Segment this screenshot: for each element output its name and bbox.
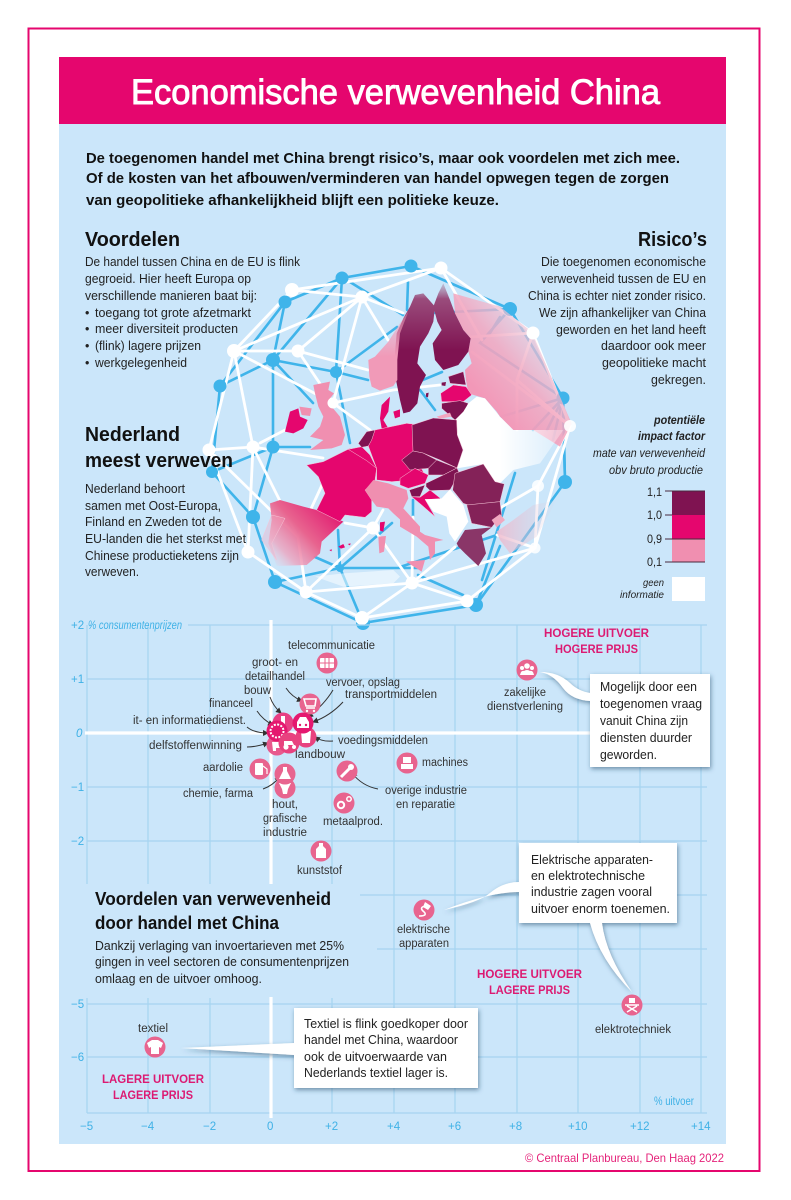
chart labels: bouw (244, 685, 272, 697)
icon: telecommunicatie (316, 652, 338, 674)
sector dots with icons (144, 652, 642, 1058)
country: Croatia (412, 490, 442, 517)
chart labels: elektrotechniek (595, 1024, 671, 1036)
callout: textiel: handel met China, waardoor (304, 1033, 458, 1047)
background panel (59, 124, 726, 1144)
icon: machines (396, 752, 418, 774)
icon: elektrotechniek (622, 994, 642, 1016)
scatter chart grid and axes: −6 (71, 1052, 84, 1064)
heading: Risico's: Risico’s (638, 229, 707, 251)
scatter chart grid and axes: +14 (691, 1121, 711, 1133)
quadrant label: hogere uitvoer lagere prijs (477, 967, 582, 997)
country: Belgium (348, 447, 377, 468)
text: Nederland: samen met Oost-Europa, (85, 499, 221, 513)
country: Bulgaria (467, 502, 502, 527)
text: Risico's: We zijn afhankelijker van China (539, 306, 706, 320)
callout: textiel: ook de uitvoerwaarde van (304, 1050, 447, 1064)
chart labels: kunststof (297, 865, 343, 877)
text: Nederland: verweven. (85, 565, 139, 579)
text: Risico's: geworden en het land heeft (556, 323, 707, 337)
icon: aardolie (250, 758, 270, 780)
map: south-west (262, 423, 427, 587)
country: Northern Ireland (299, 407, 312, 416)
legend (593, 413, 706, 601)
text: Voordelen: werkgelegenheid (94, 356, 187, 370)
scatter chart grid and axes: 0 (267, 1121, 273, 1133)
credit: © Centraal Planbureau, Den Haag 2022 (525, 1151, 724, 1165)
heading: Nederland meest verweven: Nederland (85, 424, 180, 446)
chart labels: telecommunicatie (288, 640, 375, 652)
network nodes (202, 262, 576, 625)
title (59, 57, 726, 124)
intro text (86, 150, 680, 209)
island: Sardinia (378, 536, 386, 553)
text: Risico's: China is echter niet zonder risico. (528, 289, 706, 303)
country: Hungary (426, 468, 459, 491)
chart labels: hout, (272, 799, 298, 811)
country: Romania (453, 464, 504, 505)
text: Voordelen (85, 255, 301, 370)
heading: Nederland meest verweven: meest verweven (85, 450, 233, 472)
country: Estonia (448, 372, 466, 385)
chart labels: apparaten (399, 938, 449, 950)
title: Economische verwevenheid China (131, 73, 661, 112)
region: North Africa (315, 570, 400, 587)
network nodes behind map (206, 260, 572, 630)
country: European Turkey (492, 514, 505, 527)
chart labels: landbouw (295, 749, 346, 761)
icon: overige industrie (336, 760, 358, 782)
legend: geen (643, 578, 664, 589)
text: Risico's: Die toegenomen economische (541, 255, 706, 269)
text: Risico's (528, 255, 707, 387)
heading: voordelen van verwevenheid: door handel met China (95, 912, 280, 933)
legend: 1,0 (647, 508, 662, 522)
country: Western Balkans (425, 489, 468, 542)
chart labels: zakelijke (504, 687, 546, 699)
quadrant label: hogere uitvoer hogere prijs: HOGERE PRIJS (555, 642, 638, 656)
country: Ireland (285, 408, 308, 433)
chart labels: en reparatie (396, 799, 455, 811)
legend: 0,1 (647, 555, 662, 569)
chart labels: delfstoffenwinning (149, 740, 242, 752)
country: Greece (457, 527, 492, 566)
chart pointer arrows (247, 688, 378, 789)
chart labels: vervoer, opslag (326, 677, 400, 689)
country: France (307, 448, 377, 522)
country: Czechia (402, 451, 437, 470)
icon: zakelijke dienstverlening (516, 660, 538, 680)
chart labels: chemie, farma (183, 788, 254, 800)
country: Slovakia (428, 460, 457, 475)
chart labels: aardolie (203, 762, 243, 774)
icon: hout (274, 778, 296, 798)
scatter chart grid and axes: +8 (509, 1121, 522, 1133)
map: south-east (400, 397, 563, 572)
scatter chart grid and axes (71, 620, 711, 1133)
legend: potentiële (653, 413, 705, 427)
chart labels: grafische (263, 813, 307, 825)
text: voordelen van verwevenheid: omlaag en de uitvoer omhoog. (95, 972, 262, 986)
scatter chart grid and axes: +10 (568, 1121, 588, 1133)
callout: elektrische apparaten: Elektrische apparaten- (531, 853, 653, 867)
scatter chart grid and axes: +12 (630, 1121, 650, 1133)
text: voordelen van verwevenheid: gingen in veel sectoren de consumentenprijzen (95, 955, 349, 969)
country: Norway (368, 312, 408, 391)
icon: chemie (274, 764, 296, 784)
scatter chart grid and axes: +1 (71, 674, 84, 686)
legend: 0,9 (647, 532, 662, 546)
callout: diensten: geworden. (600, 748, 657, 762)
country: Italy north (365, 480, 420, 537)
callout: elektrische apparaten: uitvoer enorm toenemen. (531, 902, 670, 916)
scatter chart grid and axes: +4 (387, 1121, 401, 1133)
scatter chart grid and axes: −1 (71, 782, 84, 794)
text: Voordelen: • (85, 339, 89, 353)
text: Voordelen: • (85, 356, 89, 370)
icon: financieel (266, 720, 288, 742)
chart labels: metaalprod. (323, 816, 383, 828)
icon: elektrische apparaten (414, 900, 434, 920)
legend: impact factor (638, 429, 706, 443)
text: Voordelen: (flink) lagere prijzen (95, 339, 201, 353)
intro text: van geopolitieke afhankelijkheid blijft een politieke keuze. (86, 192, 499, 209)
text: Risico's: gekregen. (651, 373, 706, 387)
country: Austria (400, 468, 428, 488)
map: north-west (285, 312, 408, 450)
callout: diensten: Mogelijk door een (600, 680, 697, 694)
chart labels (133, 640, 671, 1036)
scatter chart grid and axes: % consumentenprijzen (88, 620, 182, 632)
Baltic islands (426, 382, 446, 397)
text: Risico's: daardoor ook meer (601, 339, 706, 353)
country: Denmark (380, 397, 400, 428)
chart labels: overige industrie (385, 785, 467, 797)
icon: kunststof (310, 840, 332, 862)
callout: textiel: Nederlands textiel lager is. (304, 1066, 448, 1080)
country: Latvia (441, 385, 472, 402)
country: UK (310, 382, 345, 450)
icon: landbouw (278, 732, 300, 754)
chart labels: industrie (263, 827, 307, 839)
chart labels: it- en informatiedienst. (133, 715, 246, 727)
callout: elektrische apparaten: en elektrotechnische (531, 869, 645, 883)
chart labels: machines (422, 757, 468, 769)
chart labels: dienstverlening (487, 701, 563, 713)
legend: 1,1 (647, 485, 662, 499)
text: Voordelen: meer diversiteit producten (95, 322, 238, 336)
scatter chart grid and axes: −4 (141, 1121, 155, 1133)
callout: diensten: toegenomen vraag (600, 697, 702, 711)
quadrant label: hogere uitvoer lagere prijs: HOGERE UITVOER (477, 967, 582, 981)
scatter chart grid and axes: +2 (71, 620, 84, 632)
country: Spain (268, 500, 343, 566)
chart labels: elektrische (397, 924, 450, 936)
Kaliningrad (437, 413, 452, 419)
text: Nederland: Nederland behoort (85, 482, 186, 496)
legend: informatie (620, 590, 664, 601)
country: Russia (453, 293, 572, 447)
icon: transport (292, 712, 314, 734)
callout: diensten: vanuit China zijn (600, 714, 688, 728)
icon: textiel (144, 1036, 166, 1058)
heading: Nederland meest verweven (85, 424, 233, 472)
text: Risico's: verwevenheid tussen de EU en (541, 272, 706, 286)
scatter chart grid and axes: −2 (203, 1121, 216, 1133)
icon: delfstoffen (266, 734, 288, 756)
quadrant label: lagere uitvoer lagere prijs: LAGERE UITVOER (102, 1072, 204, 1086)
country: Finland (433, 283, 471, 370)
map of Europe (262, 283, 572, 587)
quadrant label: hogere uitvoer hogere prijs (544, 626, 649, 656)
heading: Voordelen: Voordelen (85, 229, 180, 251)
scatter chart grid and axes: −2 (71, 836, 84, 848)
chart labels: detailhandel (245, 671, 305, 683)
text: Voordelen: • (85, 322, 89, 336)
text: Voordelen: verschillende manieren baat bij: (85, 289, 257, 303)
chart labels: voedingsmiddelen (338, 735, 428, 747)
intro text: Of de kosten van het afbouwen/verminderen van handel opwegen tegen de zorgen (86, 170, 669, 187)
callout: elektrische apparaten: industrie zagen vooral (531, 885, 652, 899)
country: Lithuania (442, 401, 468, 420)
country: Slovenia (409, 485, 425, 497)
text: Nederland: EU-landen die het sterkst met (85, 532, 247, 546)
country: Italy south (400, 512, 443, 560)
island: Corsica (380, 522, 385, 532)
icon: voeding (296, 726, 316, 748)
chart labels: groot- en (252, 657, 298, 669)
country: Portugal (262, 515, 285, 560)
callout: diensten: diensten duurder (600, 731, 692, 745)
text: Voordelen: gegroeid. Hier heeft Europa op (85, 272, 251, 286)
scatter chart grid and axes: +6 (448, 1121, 461, 1133)
text: voordelen van verwevenheid: Dankzij verlaging van invoertarieven met 25% (95, 939, 344, 953)
callout: diensten (540, 672, 710, 767)
country: Sweden (395, 293, 435, 413)
country: Turkey (497, 500, 557, 553)
icon: detailhandel (300, 694, 320, 714)
text: Voordelen: • (85, 306, 89, 320)
chart labels: transportmiddelen (345, 689, 437, 701)
icon: metaalproducten (334, 792, 354, 814)
legend: mate van verwevenheid (593, 446, 705, 460)
heading: voordelen van verwevenheid (95, 888, 331, 933)
chart labels: textiel (138, 1023, 168, 1035)
legend: obv bruto productie (609, 463, 703, 477)
scatter chart grid and axes: 0 (76, 728, 83, 740)
network globe (206, 260, 572, 630)
callout: textiel: Textiel is flink goedkoper door (304, 1017, 468, 1031)
country: Poland (412, 418, 463, 468)
intro text: De toegenomen handel met China brengt risico’s, maar ook voordelen met zich mee. (86, 150, 680, 167)
country: Germany (368, 423, 427, 482)
callout: textiel (181, 1008, 478, 1088)
callout: elektrische apparaten (444, 843, 677, 992)
island: Sicily (406, 560, 425, 572)
country: Ukraine and Belarus (455, 397, 563, 483)
scatter chart grid and axes: −5 (80, 1121, 93, 1133)
scatter chart grid and axes: −5 (71, 999, 84, 1011)
quadrant label: hogere uitvoer lagere prijs: LAGERE PRIJS (489, 983, 570, 997)
text: voordelen van verwevenheid (95, 939, 349, 986)
scatter chart grid and axes: % uitvoer (654, 1096, 694, 1108)
islands: Balearic (329, 543, 351, 551)
text: Risico's: geopolitieke macht (602, 356, 707, 370)
text: Nederland (85, 482, 247, 579)
chart labels: financeel (209, 698, 253, 710)
icon: bouw (272, 712, 294, 734)
text: Voordelen: toegang tot grote afzetmarkt (95, 306, 252, 320)
quadrant label: hogere uitvoer hogere prijs: HOGERE UITVOER (544, 626, 649, 640)
text: Nederland: Chinese productieketens zijn (85, 549, 239, 563)
quadrant label: lagere uitvoer lagere prijs: LAGERE PRIJS (113, 1088, 193, 1102)
text: Nederland: Finland en Zweden tot de (85, 515, 222, 529)
country: Netherlands (358, 430, 375, 447)
map: north-east (395, 283, 572, 447)
heading: voordelen van verwevenheid: Voordelen van verwevenheid (95, 888, 331, 909)
scatter chart grid and axes: +2 (325, 1121, 338, 1133)
quadrant label: lagere uitvoer lagere prijs (102, 1072, 204, 1102)
text: Voordelen: De handel tussen China en de EU is flink (85, 255, 301, 269)
